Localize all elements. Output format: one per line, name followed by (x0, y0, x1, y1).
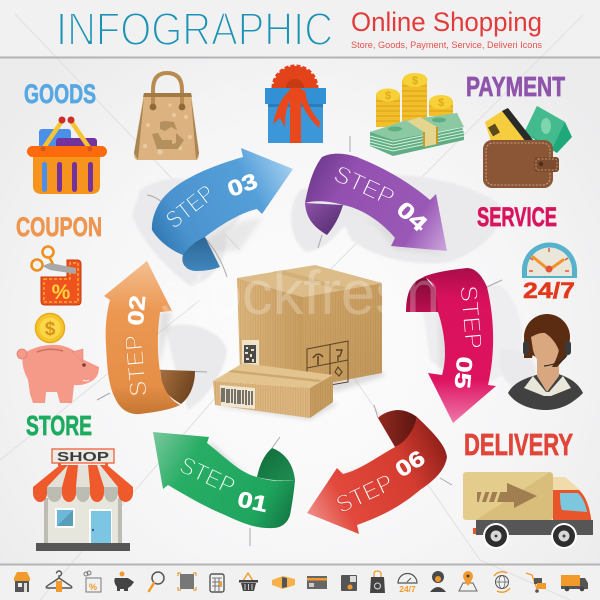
footer: magnifier (149, 572, 164, 591)
small cardboard box (213, 363, 338, 420)
footer: credit card (307, 576, 327, 589)
icon: coupon with scissors (32, 246, 81, 305)
world map (132, 174, 536, 410)
footer: truck (561, 575, 588, 591)
connector ticks (97, 136, 502, 546)
footer: piggy bank (114, 572, 134, 591)
step 02 arrow (104, 261, 195, 414)
footer: calculator (210, 574, 224, 592)
fragile symbols (307, 341, 348, 389)
step 03 arrow: 03 (224, 168, 261, 202)
icon: shop storefront (33, 449, 133, 551)
step 01 arrow: 01 (235, 486, 270, 517)
step 05 arrow: 05 (450, 356, 477, 390)
footer: basket (239, 573, 258, 591)
step 05 arrow (406, 268, 496, 423)
label: payment: PAYMENT (466, 71, 565, 102)
step 06 arrow (307, 410, 447, 534)
icon: shopping basket (27, 116, 107, 194)
icon: shop storefront: SHOP (57, 450, 109, 464)
title: INFOGRAPHIC (56, 3, 333, 55)
step 05 arrow: STEP (454, 284, 487, 350)
footer: keypad (341, 575, 357, 591)
icon: call centre agent (508, 314, 583, 410)
icon: coins and banknotes: $ (412, 75, 418, 87)
label: store: STORE (26, 410, 92, 441)
barcode (220, 385, 255, 409)
label: goods: GOODS (24, 79, 96, 109)
footer: coupon: % (89, 582, 97, 592)
footer: banknotes (272, 576, 295, 589)
subtitle: online shopping (351, 7, 542, 51)
step 01 arrow: STEP (175, 452, 239, 501)
icon: piggy bank (17, 345, 99, 403)
watermark: stockfresh (160, 259, 440, 328)
icon: wallet with card and cash (483, 106, 572, 188)
step 04 arrow (305, 154, 447, 255)
footer: hand truck (526, 573, 546, 593)
step 03 arrow: STEP (161, 180, 220, 234)
footer: coupon (84, 571, 101, 592)
icon: coins and banknotes (370, 73, 464, 156)
subtitle: online shopping: Store, Goods, Payment, Service, Deliveri Icons (351, 40, 542, 51)
header divider (0, 56, 600, 58)
footer: QR code (178, 573, 196, 590)
step 02 arrow: STEP (120, 334, 153, 398)
icon: clock 24/7 (522, 242, 578, 303)
step 06 arrow: STEP (332, 469, 398, 519)
label: coupon: COUPON (16, 212, 102, 242)
footer: clock 24/7: 24/7 (399, 584, 416, 594)
label: service: SERVICE (477, 202, 557, 232)
footer: clock 24/7 (398, 574, 417, 594)
large cardboard box (237, 265, 385, 392)
icon: gold coin (36, 314, 64, 342)
icon: recycled paper bag (134, 73, 199, 160)
footer: hanger (46, 571, 72, 592)
step 04 arrow: STEP (329, 160, 399, 212)
footer: globe (494, 572, 510, 592)
icon: gold coin: $ (45, 319, 56, 340)
icon: clock 24/7: 24/7 (523, 278, 575, 303)
icon: coins and banknotes: $ (385, 90, 391, 102)
footer icon row (14, 571, 588, 594)
icon: gift box (265, 66, 326, 143)
icon: coins and banknotes: $ (438, 97, 444, 109)
subtitle: online shopping: Online Shopping (351, 7, 542, 37)
footer divider (0, 564, 600, 566)
step 03 arrow (152, 148, 293, 271)
footer: agent (430, 571, 446, 592)
step 02 arrow: 02 (123, 294, 150, 326)
QR label (242, 340, 259, 366)
icon: coupon with scissors: % (52, 281, 71, 304)
footer: map pin (459, 571, 477, 591)
footer: shop (14, 572, 30, 592)
step 01 arrow (153, 432, 295, 528)
step 04 arrow: 04 (392, 196, 433, 237)
footer: shopping bag (370, 571, 385, 593)
icon: delivery truck (463, 472, 593, 549)
step 06 arrow: 06 (391, 445, 429, 482)
